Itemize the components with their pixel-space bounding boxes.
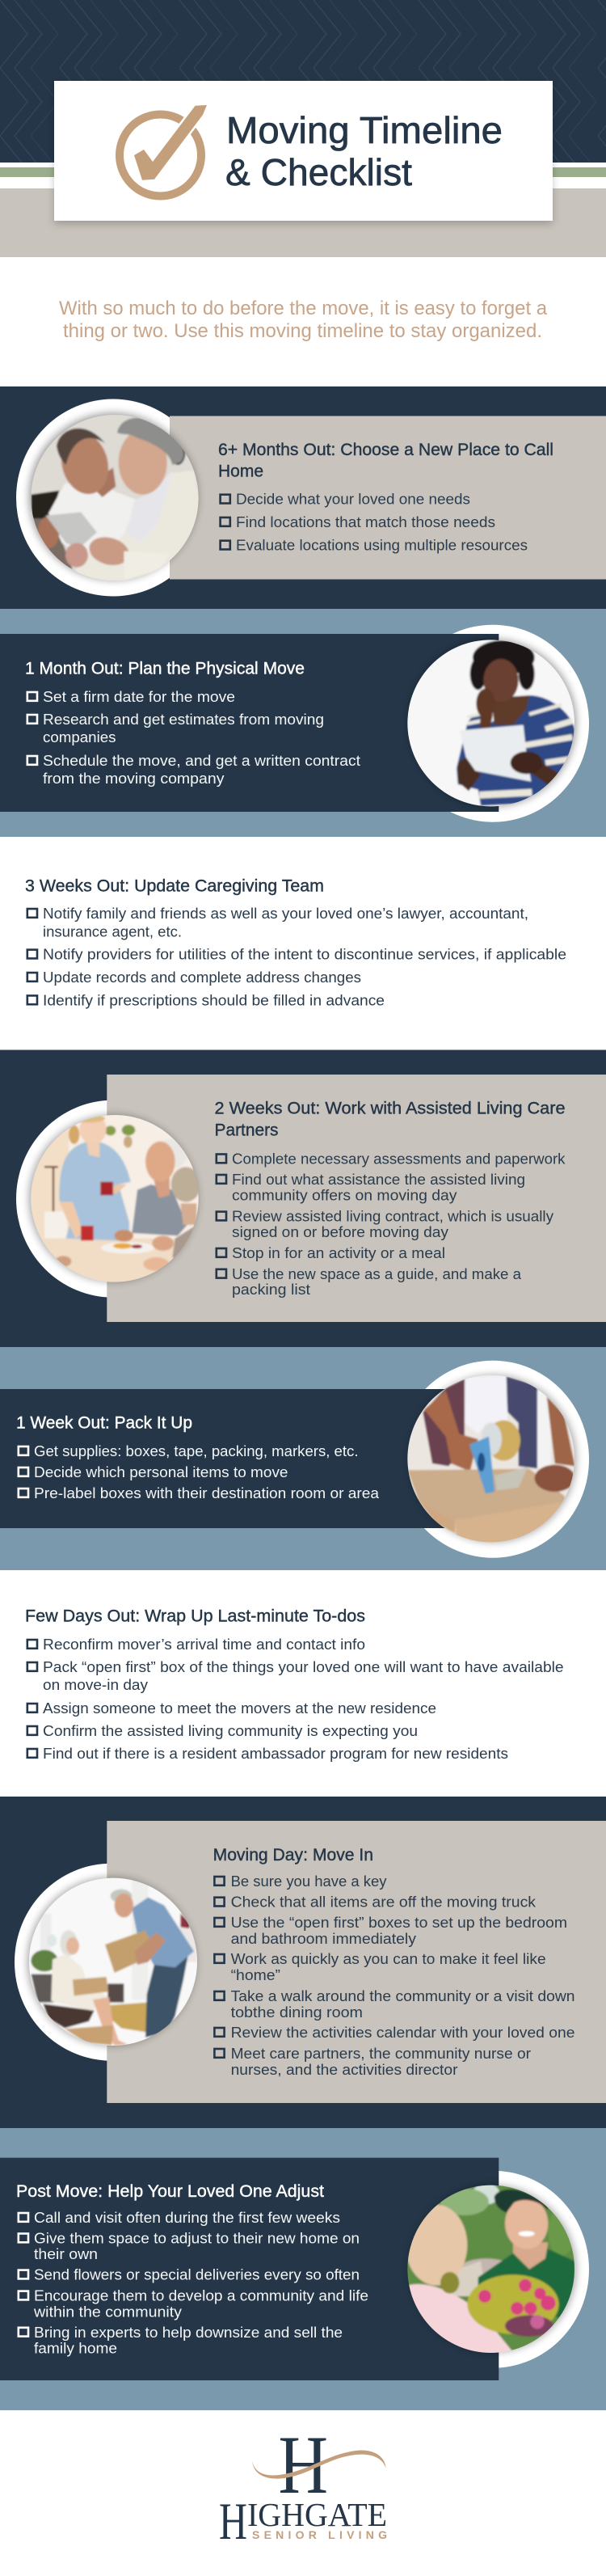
checklist: insurance agent, etc. <box>43 923 182 940</box>
checklist <box>217 1151 566 1298</box>
checklist: Review assisted living contract, which is usually <box>232 1209 553 1225</box>
photo: nurse serving seniors <box>31 1115 199 1282</box>
checklist: Decide which personal items to move <box>34 1464 288 1480</box>
checklist: Decide what your loved one needs <box>236 492 470 508</box>
checklist: Use the “open first” boxes to set up the bedroom <box>231 1915 567 1931</box>
checklist: Be sure you have a key <box>231 1873 386 1890</box>
checklist: Assign someone to meet the movers at the new residence <box>43 1700 436 1717</box>
checklist: Set a firm date for the move <box>43 689 235 705</box>
checklist: Research and get estimates from moving <box>43 712 324 728</box>
checklist: Give them space to adjust to their new home on <box>34 2230 360 2246</box>
title text: & Checklist <box>225 151 412 193</box>
checklist: Evaluate locations using multiple resources <box>236 538 528 554</box>
heading: Partners <box>215 1121 278 1140</box>
logo: Highgate Senior Living <box>219 2419 387 2551</box>
checklist: Send flowers or special deliveries every so often <box>34 2267 360 2283</box>
checklist <box>19 1443 380 1501</box>
heading: Moving Day: Move In <box>213 1846 373 1864</box>
checklist: Notify family and friends as well as your loved one’s lawyer, accountant, <box>43 906 528 922</box>
title card <box>54 81 553 221</box>
checklist: tobthe dining room <box>231 2004 363 2021</box>
checklist: their own <box>34 2246 98 2262</box>
checklist: Get supplies: boxes, tape, packing, markers, etc. <box>34 1443 359 1459</box>
heading: 1 Month Out: Plan the Physical Move <box>25 660 305 678</box>
panel: 6+ months out <box>0 386 606 609</box>
checklist <box>27 906 566 1008</box>
panel: post move <box>0 2128 606 2410</box>
heading: Few Days Out: Wrap Up Last-minute To-dos <box>25 1607 365 1626</box>
photo: man and woman with tablet <box>31 415 199 581</box>
photo: delivery man with flowers <box>407 2185 574 2353</box>
heading: 6+ Months Out: Choose a New Place to Call <box>218 441 553 459</box>
heading: Post Move: Help Your Loved One Adjust <box>16 2182 324 2201</box>
logo: Highgate Senior Living: H <box>219 2493 247 2551</box>
checklist: within the community <box>33 2304 182 2321</box>
checklist: Meet care partners, the community nurse or <box>231 2046 531 2062</box>
checklist: Encourage them to develop a community and life <box>34 2288 368 2304</box>
checklist: Complete necessary assessments and paperwork <box>232 1151 566 1168</box>
checklist: Check that all items are off the moving truck <box>231 1894 537 1911</box>
checklist: Schedule the move, and get a written contract <box>43 753 360 769</box>
logo: Highgate Senior Living: H <box>278 2419 328 2511</box>
photo: woman on phone with paper <box>407 640 574 807</box>
checklist: family home <box>34 2341 117 2357</box>
checklist: nurses, and the activities director <box>231 2062 457 2078</box>
checklist: Confirm the assisted living community is expecting you <box>43 1723 418 1739</box>
checklist <box>19 2210 368 2357</box>
intro text: With so much to do before the move, it is easy to forget a <box>59 298 548 319</box>
checklist: Pack “open first” box of the things your loved one will want to have available <box>43 1659 564 1675</box>
heading <box>218 441 553 481</box>
panel: moving day <box>0 1797 606 2128</box>
checklist: Use the new space as a guide, and make a <box>232 1266 522 1282</box>
checklist: on move-in day <box>43 1677 148 1693</box>
heading: Home <box>218 462 263 481</box>
checklist <box>221 492 528 554</box>
panel: 2 weeks out <box>0 1049 606 1347</box>
checklist: companies <box>43 729 116 745</box>
checklist <box>27 689 360 787</box>
panel: few days out <box>25 1607 564 1762</box>
checklist: packing list <box>232 1282 310 1298</box>
logo: Highgate Senior Living: SENIOR LIVING <box>252 2528 387 2541</box>
title text: Moving Timeline <box>226 109 503 151</box>
checklist: Reconfirm mover’s arrival time and contact info <box>43 1636 365 1653</box>
logo swoosh <box>252 2450 386 2479</box>
heading: 2 Weeks Out: Work with Assisted Living Care <box>215 1100 566 1118</box>
intro text <box>59 298 548 342</box>
checklist: Pre-label boxes with their destination room or area <box>34 1485 380 1501</box>
checklist: and bathroom immediately <box>231 1931 416 1947</box>
checklist: Work as quickly as you can to make it feel like <box>231 1951 546 1967</box>
panel: 1 month out <box>0 609 606 837</box>
checklist <box>214 1873 575 2078</box>
checklist: Find out if there is a resident ambassador program for new residents <box>43 1746 508 1762</box>
checklist: Take a walk around the community or a visit down <box>231 1988 575 2004</box>
checklist: from the moving company <box>43 771 225 787</box>
panel: 1 week out <box>0 1347 606 1570</box>
checklist: Bring in experts to help downsize and sell the <box>34 2325 343 2341</box>
photo: taping a box <box>407 1375 574 1543</box>
title text <box>225 109 503 193</box>
checklist: Notify providers for utilities of the intent to discontinue services, if applicable <box>43 947 566 963</box>
header background <box>0 0 606 257</box>
photo: couple unpacking boxes <box>29 1877 197 2046</box>
checklist: signed on or before moving day <box>232 1224 448 1240</box>
checklist: Call and visit often during the first few weeks <box>34 2210 340 2226</box>
heading <box>215 1100 566 1140</box>
checklist: Update records and complete address changes <box>43 969 361 986</box>
checklist: Stop in for an activity or a meal <box>232 1245 445 1261</box>
checklist: Identify if prescriptions should be filled in advance <box>43 992 385 1008</box>
panel: 3 weeks out <box>25 876 566 1008</box>
logo: Highgate Senior Living: IGHGATE <box>247 2496 387 2533</box>
checklist: community offers on moving day <box>232 1187 457 1203</box>
checklist <box>27 1636 564 1762</box>
checklist: Find locations that match those needs <box>236 514 495 530</box>
heading: 3 Weeks Out: Update Caregiving Team <box>25 876 324 895</box>
checklist: Find out what assistance the assisted living <box>232 1172 525 1188</box>
icon: check mark in circle <box>120 105 207 196</box>
intro text: thing or two. Use this moving timeline to stay organized. <box>63 320 542 342</box>
checklist: Review the activities calendar with your loved one <box>231 2025 575 2041</box>
checklist: “home” <box>231 1967 280 1983</box>
heading: 1 Week Out: Pack It Up <box>16 1413 192 1432</box>
